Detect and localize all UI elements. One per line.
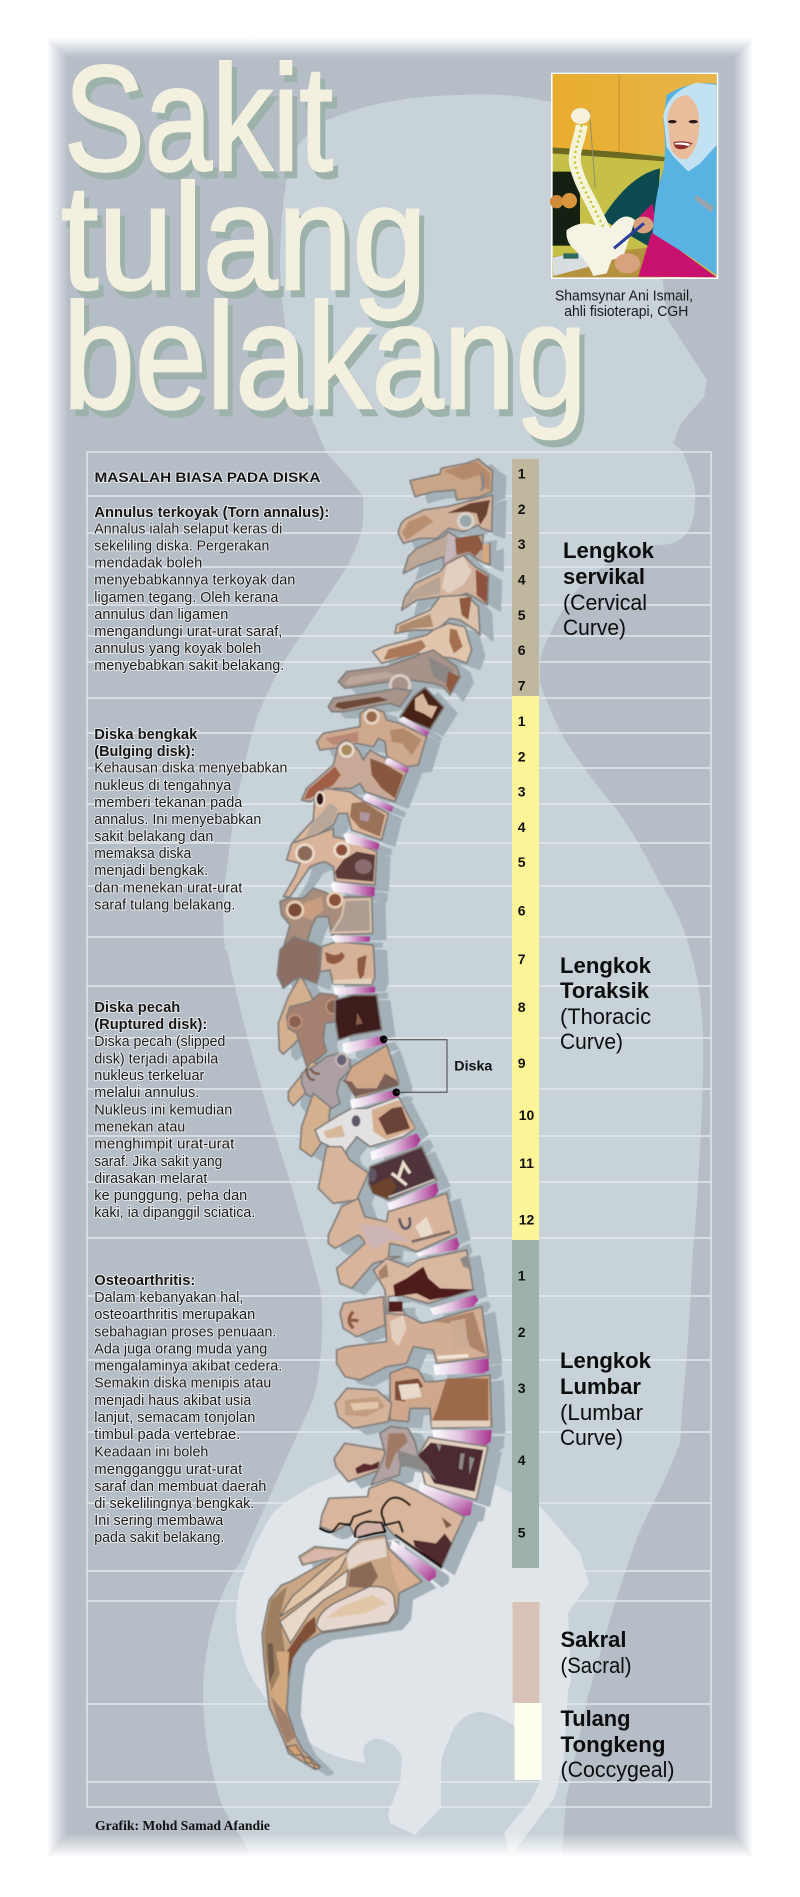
text block: ruptured disk: saraf. Jika sakit yang bbox=[94, 1154, 222, 1170]
vertebra numbers: 2 bbox=[518, 501, 526, 517]
vertebra numbers: 7 bbox=[518, 678, 526, 694]
text block: osteoarthritis: Ada juga orang muda yang bbox=[94, 1342, 267, 1358]
text block: bulging disk: nukleus di tengahnya bbox=[94, 778, 232, 794]
spine shadow bbox=[275, 465, 506, 1775]
text block: ruptured disk bbox=[94, 1000, 255, 1221]
text block: osteoarthritis: Osteoarthritis: bbox=[94, 1273, 195, 1289]
vertebra numbers: 9 bbox=[518, 1055, 526, 1071]
photo caption: Shamsynar Ani Ismail, bbox=[555, 289, 693, 305]
text block: ruptured disk: dirasakan melarat bbox=[94, 1171, 207, 1187]
text block: osteoarthritis: mengalaminya akibat cedera. bbox=[94, 1359, 282, 1375]
vertebra numbers: 5 bbox=[518, 1525, 526, 1541]
label: coccygeal: Tongkeng bbox=[560, 1732, 666, 1757]
vertebra bar: lumbar bbox=[512, 1240, 539, 1568]
label: sacral: (Sacral) bbox=[560, 1653, 632, 1678]
vertebra numbers: 7 bbox=[518, 951, 526, 967]
text block: ruptured disk: nukleus terkeluar bbox=[94, 1068, 204, 1084]
credit: Grafik: Mohd Samad Afandie bbox=[95, 1819, 270, 1834]
text block: ruptured disk: kaki, ia dipanggil sciatica. bbox=[94, 1205, 255, 1221]
label: lumbar curve bbox=[560, 1348, 652, 1450]
text block: bulging disk: memberi tekanan pada bbox=[94, 795, 243, 811]
text block: bulging disk: annalus. Ini menyebabkan bbox=[94, 812, 261, 828]
vertebra numbers: 2 bbox=[518, 749, 526, 765]
text block: torn annulus: mengandungi urat-urat saraf, bbox=[94, 624, 282, 640]
text block: bulging disk: Diska bengkak bbox=[94, 727, 198, 743]
label: thoracic curve: Toraksik bbox=[560, 978, 650, 1003]
text block: osteoarthritis: di sekelilingnya bengkak. bbox=[94, 1496, 254, 1512]
label: coccygeal bbox=[560, 1706, 674, 1782]
text block: bulging disk: Kehausan diska menyebabkan bbox=[94, 761, 287, 777]
label: lumbar curve: Lengkok bbox=[560, 1348, 652, 1373]
vertebra numbers: 6 bbox=[518, 903, 526, 919]
lumbar vertebrae L4 and L5, sacrum and tailbone bbox=[262, 1427, 488, 1769]
photo caption bbox=[555, 289, 693, 320]
text block: torn annulus: menyebabkan sakit belakang. bbox=[94, 658, 284, 674]
text block: bulging disk: (Bulging disk): bbox=[94, 744, 195, 760]
text block: torn annulus: menyebabkannya terkoyak dan bbox=[94, 573, 295, 589]
text block: osteoarthritis: pada sakit belakang. bbox=[94, 1530, 224, 1546]
photo caption: ahli fisioterapi, CGH bbox=[564, 304, 688, 320]
label: coccygeal: (Coccygeal) bbox=[560, 1757, 674, 1782]
text block: torn annulus: mendadak boleh bbox=[94, 556, 202, 572]
label: cervical curve: servikal bbox=[563, 564, 645, 589]
callout: disc connector bracket bbox=[384, 1040, 447, 1092]
pelvis silhouette bbox=[236, 1458, 589, 1857]
title: tulang bbox=[61, 153, 427, 321]
table frame and rows bbox=[87, 452, 711, 1807]
callout label: disc: Diska bbox=[454, 1059, 493, 1074]
thoracic vertebrae T2 to T7 bbox=[280, 707, 427, 970]
vertebra numbers: 1 bbox=[518, 1268, 526, 1284]
text block: ruptured disk: disk) terjadi apabila bbox=[94, 1051, 219, 1067]
body silhouette bbox=[203, 94, 707, 1857]
vertebra bar: thoracic bbox=[512, 696, 539, 1240]
vertebra bar: sacral bbox=[512, 1602, 540, 1703]
thoracic T12 and lumbar vertebrae L1 to L3 bbox=[328, 1193, 492, 1446]
text block: torn annulus: Annulus terkoyak (Torn annalus): bbox=[94, 505, 329, 521]
vertebra numbers: 2 bbox=[518, 1324, 526, 1340]
label: lumbar curve: (Lumbar bbox=[560, 1400, 643, 1425]
text block: ruptured disk: melalui annulus. bbox=[94, 1085, 199, 1101]
label: coccygeal: Tulang bbox=[560, 1706, 630, 1731]
label: cervical curve: (Cervical bbox=[563, 590, 647, 615]
text block: torn annulus: ligamen tegang. Oleh kerana bbox=[94, 590, 279, 606]
vertebra numbers: 1 bbox=[518, 466, 526, 482]
label: cervical curve bbox=[563, 538, 655, 640]
text block: torn annulus bbox=[94, 505, 329, 674]
text block: torn annulus: annulus yang koyak boleh bbox=[94, 641, 261, 657]
vertebra numbers: 3 bbox=[518, 536, 526, 552]
vertebra numbers: 5 bbox=[518, 607, 526, 623]
text block: torn annulus: Annalus ialah selaput keras di bbox=[94, 521, 282, 537]
text block: bulging disk: saraf tulang belakang. bbox=[94, 898, 235, 914]
cervical vertebrae bbox=[328, 459, 493, 729]
label: sacral bbox=[560, 1627, 632, 1678]
vertebra numbers: 1 bbox=[518, 713, 526, 729]
title: belakang bbox=[63, 272, 587, 440]
text block: bulging disk: dan menekan urat-urat bbox=[94, 881, 242, 897]
text block: osteoarthritis: saraf dan membuat daerah bbox=[94, 1479, 266, 1495]
text block: osteoarthritis: Ini sering membawa bbox=[94, 1513, 224, 1529]
vertebra numbers bbox=[518, 466, 534, 1541]
vertebra numbers: 3 bbox=[518, 784, 526, 800]
text block: osteoarthritis bbox=[94, 1273, 282, 1546]
text block: ruptured disk: menekan atau bbox=[94, 1120, 185, 1136]
thoracic vertebrae T7 to T11 bbox=[277, 937, 437, 1203]
vertebra numbers: 4 bbox=[518, 819, 526, 835]
text block: torn annulus: annulus dan ligamen bbox=[94, 607, 228, 623]
text block: bulging disk: memaksa diska bbox=[94, 846, 192, 862]
label: thoracic curve: Lengkok bbox=[560, 953, 652, 978]
vertebra numbers: 5 bbox=[518, 854, 526, 870]
text block: ruptured disk: ke punggung, peha dan bbox=[94, 1188, 247, 1204]
text block: bulging disk: sakit belakang dan bbox=[94, 829, 213, 845]
vertebra numbers: 11 bbox=[519, 1155, 534, 1171]
text block: osteoarthritis: Keadaan ini boleh bbox=[94, 1445, 208, 1461]
label: thoracic curve: Curve) bbox=[560, 1029, 623, 1054]
vertebra numbers: 6 bbox=[518, 642, 526, 658]
vertebra numbers: 4 bbox=[518, 1452, 526, 1468]
label: cervical curve: Lengkok bbox=[563, 538, 655, 563]
text block: osteoarthritis: Dalam kebanyakan hal, bbox=[94, 1290, 243, 1306]
text block: osteoarthritis: lanjut, semacam tonjolan bbox=[94, 1410, 255, 1426]
thoracic discs bbox=[331, 717, 429, 995]
label: thoracic curve: (Thoracic bbox=[560, 1004, 651, 1029]
text block: osteoarthritis: Semakin diska menipis atau bbox=[94, 1376, 271, 1392]
vertebra numbers: 10 bbox=[519, 1107, 534, 1123]
vertebra numbers: 8 bbox=[518, 999, 526, 1015]
label: lumbar curve: Lumbar bbox=[560, 1374, 641, 1399]
text block: osteoarthritis: timbul pada vertebrae. bbox=[94, 1427, 240, 1443]
title bbox=[61, 34, 587, 440]
connector dots on discs bbox=[380, 1036, 400, 1096]
vertebra numbers: 12 bbox=[519, 1212, 534, 1228]
text block: ruptured disk: Nukleus ini kemudian bbox=[94, 1103, 232, 1119]
photo: physiotherapist with spine model bbox=[550, 73, 718, 279]
text block: ruptured disk: Diska pecah bbox=[94, 1000, 180, 1016]
label: thoracic curve bbox=[560, 953, 652, 1054]
heading: common disc problems: MASALAH BIASA PADA DISKA bbox=[94, 469, 320, 485]
vertebra numbers: 4 bbox=[518, 572, 526, 588]
text block: ruptured disk: (Ruptured disk): bbox=[94, 1017, 207, 1033]
label: sacral: Sakral bbox=[560, 1627, 626, 1652]
text block: osteoarthritis: osteoarthritis merupakan bbox=[94, 1307, 255, 1323]
label: cervical curve: Curve) bbox=[563, 615, 626, 640]
text block: ruptured disk: Diska pecah (slipped bbox=[94, 1034, 225, 1050]
text block: torn annulus: sekeliling diska. Pergerakan bbox=[94, 539, 269, 555]
vertebra bar: coccygeal bbox=[515, 1703, 542, 1780]
title: Sakit bbox=[64, 34, 333, 202]
label: lumbar curve: Curve) bbox=[560, 1425, 623, 1450]
text block: bulging disk: menjadi bengkak. bbox=[94, 863, 208, 879]
spine illustration bbox=[262, 459, 493, 1769]
text block: osteoarthritis: mengganggu urat-urat bbox=[94, 1462, 242, 1478]
vertebra numbers: 3 bbox=[518, 1380, 526, 1396]
text block: osteoarthritis: sebahagian proses penuaan. bbox=[94, 1325, 276, 1341]
text block: bulging disk bbox=[94, 727, 287, 914]
vertebra bar: cervical bbox=[512, 459, 539, 696]
text block: ruptured disk: menghimpit urat-urat bbox=[94, 1137, 234, 1153]
text block: osteoarthritis: menjadi haus akibat usia bbox=[94, 1393, 252, 1409]
